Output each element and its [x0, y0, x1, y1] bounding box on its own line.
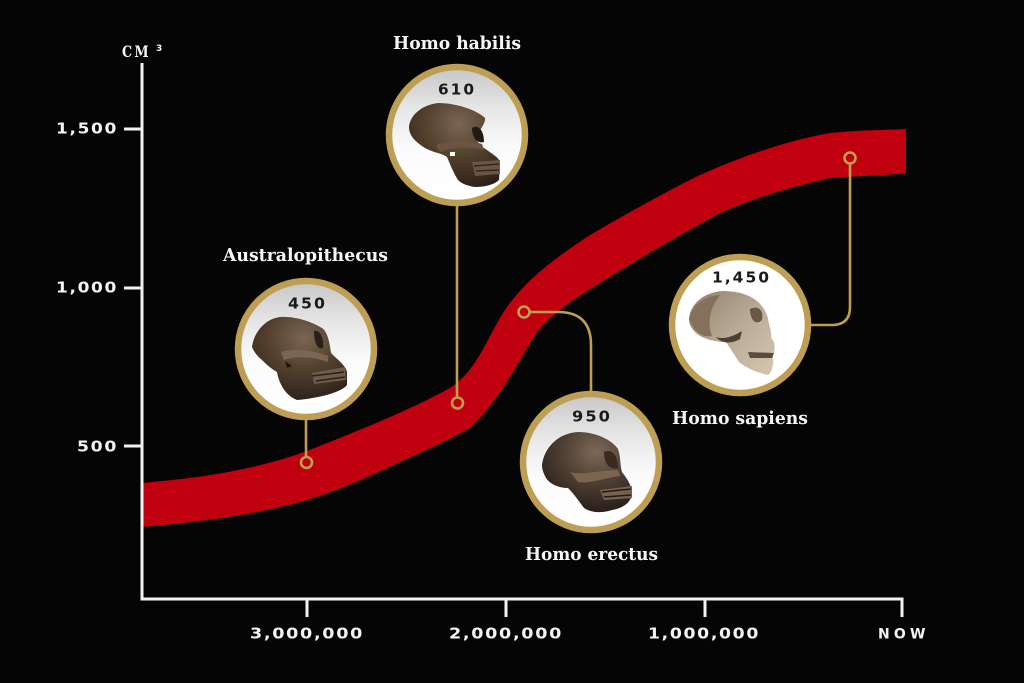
y axis labels: 500 [77, 438, 118, 456]
x axis labels [250, 624, 927, 642]
medallion [389, 67, 525, 203]
value: 450 [288, 294, 327, 312]
species: Australopithecus [222, 245, 388, 417]
name: Homo habilis [393, 33, 521, 54]
name: Homo sapiens [672, 408, 808, 429]
value: 950 [572, 408, 612, 426]
x axis labels: 3,000,000 [250, 624, 364, 642]
y axis unit superscript: 3 [156, 44, 164, 54]
icon: skull [409, 103, 500, 187]
x axis labels: 2,000,000 [449, 624, 563, 642]
axes [124, 63, 902, 617]
name: Australopithecus [222, 245, 388, 266]
y axis labels [56, 120, 118, 456]
icon: skull [689, 291, 775, 375]
icon: skull [252, 317, 347, 400]
species: Homo erectus [523, 394, 659, 565]
species: Homo habilis [389, 33, 525, 203]
value: 1,450 [712, 268, 771, 286]
x axis labels: NOW [878, 626, 927, 642]
value: 610 [438, 80, 476, 98]
icon: skull [542, 432, 632, 512]
y axis labels: 1,500 [56, 120, 118, 138]
medallion [672, 257, 808, 393]
connectors and markers [301, 152, 856, 468]
y axis unit: CM [122, 42, 151, 61]
y axis labels: 1,000 [56, 278, 118, 296]
red brain size ribbon [142, 129, 906, 527]
medallion [523, 394, 659, 530]
medallion [238, 281, 374, 417]
name: Homo erectus [525, 544, 658, 565]
species: Homo sapiens [672, 257, 808, 429]
x axis labels: 1,000,000 [648, 624, 760, 642]
